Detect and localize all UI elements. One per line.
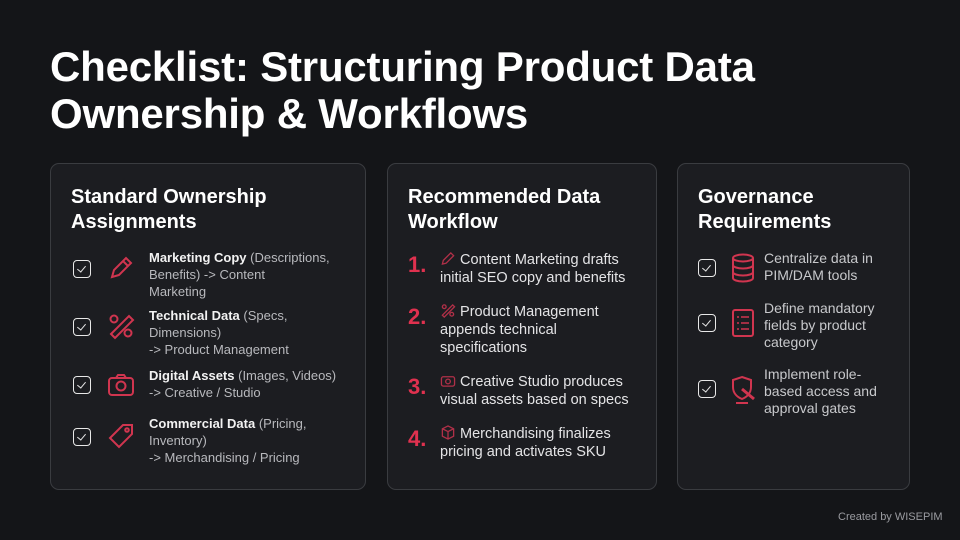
item: commercial data: -> Merchandising / Pricing: [149, 450, 300, 465]
req 1: Centralize data in: [764, 250, 873, 266]
item: digital assets: Digital Assets (Images, Videos): [149, 368, 336, 383]
step 1: 1.: [408, 252, 426, 277]
step 1: [408, 252, 625, 286]
item: commercial data: Commercial Data (Pricing,: [149, 416, 307, 431]
step 2: Product Management: [460, 304, 599, 320]
title: Ownership & Workflows: [50, 90, 528, 137]
item: technical data: [73, 308, 289, 357]
step 4: Merchandising finalizes: [460, 426, 611, 442]
heading: Workflow: [408, 211, 498, 233]
heading: Standard Ownership: [71, 186, 267, 208]
panel: workflow: [387, 163, 657, 490]
step 3: 3.: [408, 374, 426, 399]
item: technical data: Technical Data (Specs,: [149, 308, 287, 323]
item: technical data: Dimensions): [149, 325, 221, 340]
step 3: [408, 374, 629, 408]
title: Checklist: Structuring Product Data: [50, 43, 755, 90]
step 4: [408, 425, 611, 460]
heading: Governance: [698, 186, 814, 208]
req 2: fields by product: [764, 317, 866, 333]
req 2: category: [764, 334, 818, 350]
step 4: pricing and activates SKU: [440, 444, 606, 460]
req 3: [698, 366, 877, 416]
step 1: Content Marketing drafts: [460, 252, 619, 268]
req 1: [698, 250, 873, 283]
req 3: based access and: [764, 383, 877, 399]
step 2: specifications: [440, 340, 527, 356]
step 2: [408, 304, 599, 356]
step 3: Creative Studio produces: [460, 374, 623, 390]
heading: [71, 186, 267, 233]
item: digital assets: [73, 368, 336, 400]
req 3: Implement role-: [764, 366, 861, 382]
step 4: 4.: [408, 426, 426, 451]
item: marketing copy: Marketing Copy (Descriptions,: [149, 250, 330, 265]
item: technical data: -> Product Management: [149, 342, 289, 357]
panel: standard ownership: [50, 163, 366, 490]
req 1: PIM/DAM tools: [764, 267, 857, 283]
req 2: [698, 300, 875, 350]
item: marketing copy: Marketing: [149, 284, 206, 299]
heading: Recommended Data: [408, 186, 600, 208]
title: [50, 43, 756, 137]
footer credit: Created by WISEPIM: [838, 511, 943, 523]
heading: [408, 186, 600, 233]
item: commercial data: Inventory): [149, 433, 207, 448]
req 2: Define mandatory: [764, 300, 875, 316]
step 3: visual assets based on specs: [440, 392, 629, 408]
item: marketing copy: Benefits) -> Content: [149, 267, 265, 282]
step 1: initial SEO copy and benefits: [440, 270, 625, 286]
heading: Assignments: [71, 211, 197, 233]
req 3: approval gates: [764, 400, 856, 416]
item: commercial data: [73, 416, 307, 465]
panel: governance: [677, 163, 910, 490]
heading: Requirements: [698, 211, 831, 233]
item: digital assets: -> Creative / Studio: [149, 385, 261, 400]
heading: [698, 186, 831, 233]
step 2: 2.: [408, 304, 426, 329]
step 2: appends technical: [440, 322, 557, 338]
item: marketing copy: [73, 250, 330, 299]
